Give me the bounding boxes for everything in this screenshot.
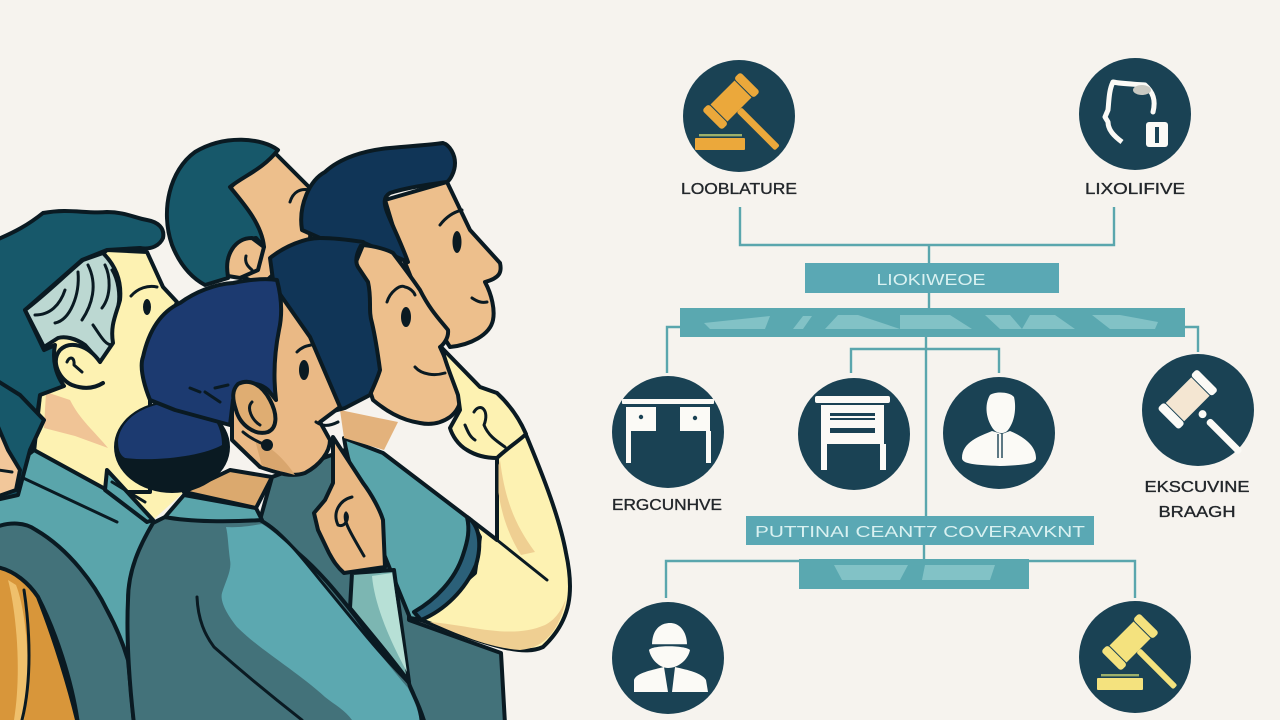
icon: yellow gavel xyxy=(1079,601,1194,713)
eye and brow xyxy=(143,299,151,315)
body xyxy=(127,517,425,720)
icon: headset and lock xyxy=(1079,58,1191,170)
neck: middle man xyxy=(340,410,398,450)
org chart: connector lines xyxy=(666,207,1198,598)
cuff xyxy=(350,570,409,682)
arm xyxy=(421,430,570,650)
icon: person bust xyxy=(943,377,1055,489)
box: government heading xyxy=(746,516,1094,545)
shirt highlight xyxy=(222,524,420,720)
cuff xyxy=(414,517,479,620)
torso xyxy=(260,450,505,720)
sleeve xyxy=(344,438,480,620)
bun xyxy=(114,401,230,493)
face and neck xyxy=(34,250,177,492)
shirt xyxy=(0,450,153,720)
earring xyxy=(261,439,273,451)
pointing hand xyxy=(314,437,385,573)
person: man in front with raised arm, head xyxy=(301,143,501,347)
icon: gold gavel, legislature xyxy=(683,60,797,172)
box: branch heading xyxy=(805,263,1059,293)
neck xyxy=(184,470,272,508)
box: branch heading: LIOKIWEOE xyxy=(876,272,986,289)
person: orange figure at bottom left xyxy=(0,567,78,720)
label: legislative: LIXOLIFIVE xyxy=(1085,181,1185,198)
icon: worker with helmet xyxy=(612,602,724,714)
person: back man xyxy=(167,140,312,285)
hair xyxy=(142,279,281,425)
label: executive branch: BRAAGH xyxy=(1158,504,1236,521)
bar: short teal banner xyxy=(799,559,1029,589)
label: executive branch: EKSCUVINE xyxy=(1144,479,1250,496)
icon: white gavel xyxy=(1142,354,1261,472)
face xyxy=(232,290,340,475)
person: man with raised arm, body xyxy=(260,430,570,720)
person: middle man xyxy=(270,238,460,424)
icon: lectern xyxy=(798,378,910,490)
ear xyxy=(56,345,103,388)
person: left man with grey hair xyxy=(0,211,184,720)
hair xyxy=(0,211,163,480)
icon: desk with two panels xyxy=(612,376,724,488)
hand: yellow pointing hand on chin xyxy=(442,348,526,458)
ear xyxy=(233,382,275,433)
label: legislature: LOOBLATURE xyxy=(681,181,797,198)
bar: wide teal banner xyxy=(680,308,1185,337)
box: government heading: PUTTINAI CEANT7 COVERAVKNT xyxy=(755,524,1085,541)
illustration: group of people looking right xyxy=(0,140,570,720)
grey hair patch xyxy=(25,253,120,362)
person: woman with bun xyxy=(114,279,425,720)
person: far left cropped face xyxy=(0,380,44,500)
label: executive: ERGCUNHVE xyxy=(612,497,722,514)
label: executive branch xyxy=(1144,479,1250,521)
collar xyxy=(165,495,262,521)
